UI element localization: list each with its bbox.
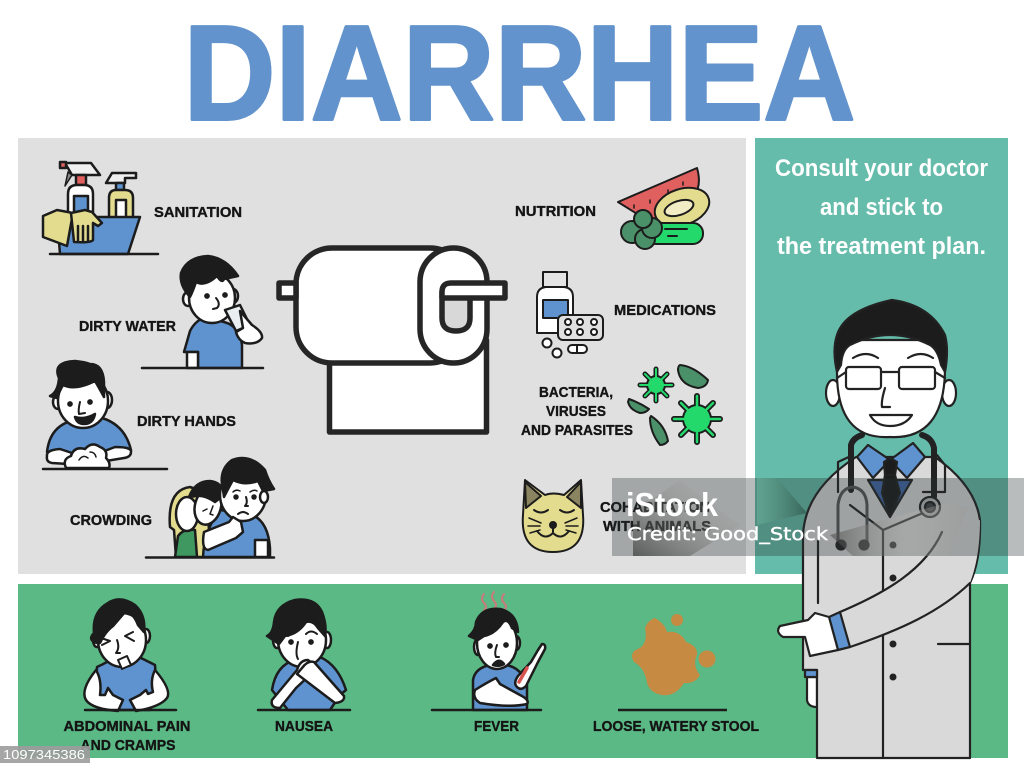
divider: stool line [618, 709, 727, 711]
label: cohabitation with animals [600, 500, 711, 535]
icon: cat [523, 480, 583, 552]
label: loose watery stool: LOOSE, WATERY STOOL [593, 719, 759, 735]
label: nausea: NAUSEA [275, 719, 333, 735]
sub: lab coat [803, 457, 980, 758]
advice text [775, 155, 988, 260]
panel: causes [18, 138, 746, 574]
doctor figure [778, 300, 980, 758]
sub: shirt collar and tie [868, 480, 912, 517]
icon: nausea person [258, 600, 350, 710]
sub: pocket hand [807, 677, 817, 707]
label: bacteria, viruses and parasites: VIRUSES [546, 404, 606, 420]
sub: arm and hand [840, 520, 980, 647]
sub: buttons [890, 542, 896, 680]
label: abdominal pain and cramps [64, 719, 190, 754]
label: cohabitation with animals: COHABITATION [600, 500, 710, 516]
title: DIARRHEA [184, 0, 855, 148]
icon: sanitation [43, 162, 158, 254]
advice text: the treatment plan. [777, 233, 986, 260]
label: fever: FEVER [474, 719, 519, 735]
label: abdominal pain and cramps: ABDOMINAL PAIN [64, 719, 190, 735]
panel: symptoms [18, 584, 1008, 758]
icon: abdominal pain person [84, 599, 176, 711]
label: medications: MEDICATIONS [614, 303, 716, 319]
icon: toilet paper roll [279, 248, 505, 432]
watermark brand: iStock [626, 486, 719, 523]
icon: medications [537, 272, 603, 358]
label: dirty hands: DIRTY HANDS [137, 414, 236, 430]
image id tag: 1097345386 [3, 747, 85, 762]
label: bacteria, viruses and parasites: AND PARASITES [521, 423, 633, 439]
label: dirty water: DIRTY WATER [79, 319, 177, 335]
panel: doctor advice [755, 138, 1008, 574]
advice text: Consult your doctor [775, 155, 988, 182]
label: bacteria, viruses and parasites [521, 385, 633, 439]
advice text: and stick to [820, 194, 943, 221]
label: abdominal pain and cramps: AND CRAMPS [80, 738, 176, 754]
label: bacteria, viruses and parasites: BACTERIA, [539, 385, 613, 401]
label: sanitation: SANITATION [154, 205, 242, 221]
watermark band [612, 478, 1024, 556]
label: nutrition: NUTRITION [515, 204, 596, 220]
watermark credit: Credit: Good_Stock [627, 524, 829, 545]
icon: fruit and vegetables [618, 168, 714, 249]
icon: person washing hands [43, 361, 167, 469]
icon: germs [628, 365, 720, 445]
icon: crowding people [146, 458, 274, 558]
label: crowding: CROWDING [70, 513, 152, 529]
icon: fever person [432, 592, 545, 710]
sub: stethoscope [851, 435, 934, 497]
sub: head [826, 380, 840, 406]
icon: stool stain [632, 614, 716, 695]
icon: person drinking dirty water [142, 256, 263, 368]
label: cohabitation with animals: WITH ANIMALS [603, 519, 711, 535]
